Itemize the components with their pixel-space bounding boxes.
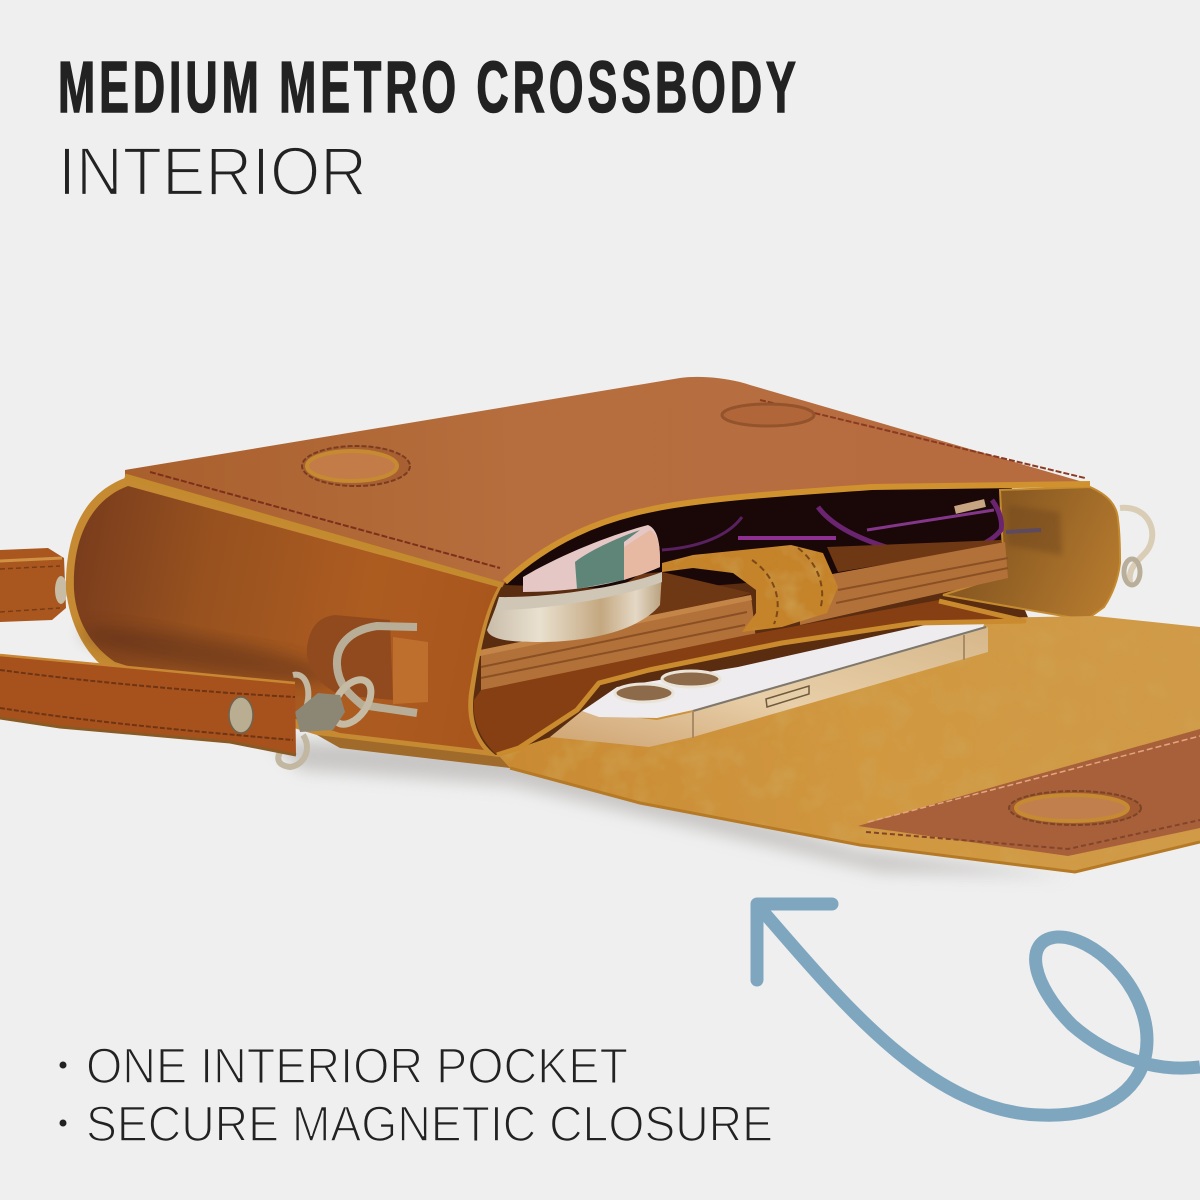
bullet: one interior pocket: ONE INTERIOR POCKET (86, 1038, 628, 1094)
D-ring tab and hardware (278, 615, 428, 767)
round tin (487, 525, 662, 642)
magnet stud rear (722, 404, 814, 426)
title: MEDIUM METRO CROSSBODY (58, 47, 796, 128)
subtitle: INTERIOR (58, 133, 367, 210)
rear strap (0, 548, 67, 622)
ground shadow (270, 740, 1070, 876)
interior darkness (505, 485, 1030, 590)
feature list (60, 1038, 773, 1152)
notebook closure tab (662, 545, 838, 632)
suede open flap (330, 616, 1200, 872)
right interior suede wall (943, 487, 1120, 620)
product photo: leather crossbody bag (0, 377, 1200, 876)
smartphone (550, 617, 988, 747)
inner pocket panel (474, 600, 1024, 755)
glasses (662, 500, 1041, 556)
bullet: secure magnetic closure: SECURE MAGNETIC CLOSURE (86, 1096, 773, 1152)
tin lid with stripes (523, 525, 660, 592)
top flap (125, 377, 1090, 586)
arrow: hand-drawn blue arrow pointing to bag (757, 904, 1200, 1115)
bag side panel (66, 478, 510, 768)
notebook (480, 540, 1008, 692)
right ring hardware (1120, 508, 1152, 585)
interior backing (460, 484, 1030, 757)
notebook cover (520, 540, 1003, 650)
front strap (0, 655, 296, 755)
magnet stud front (302, 446, 410, 486)
leather flap end panel with magnet (858, 729, 1200, 856)
